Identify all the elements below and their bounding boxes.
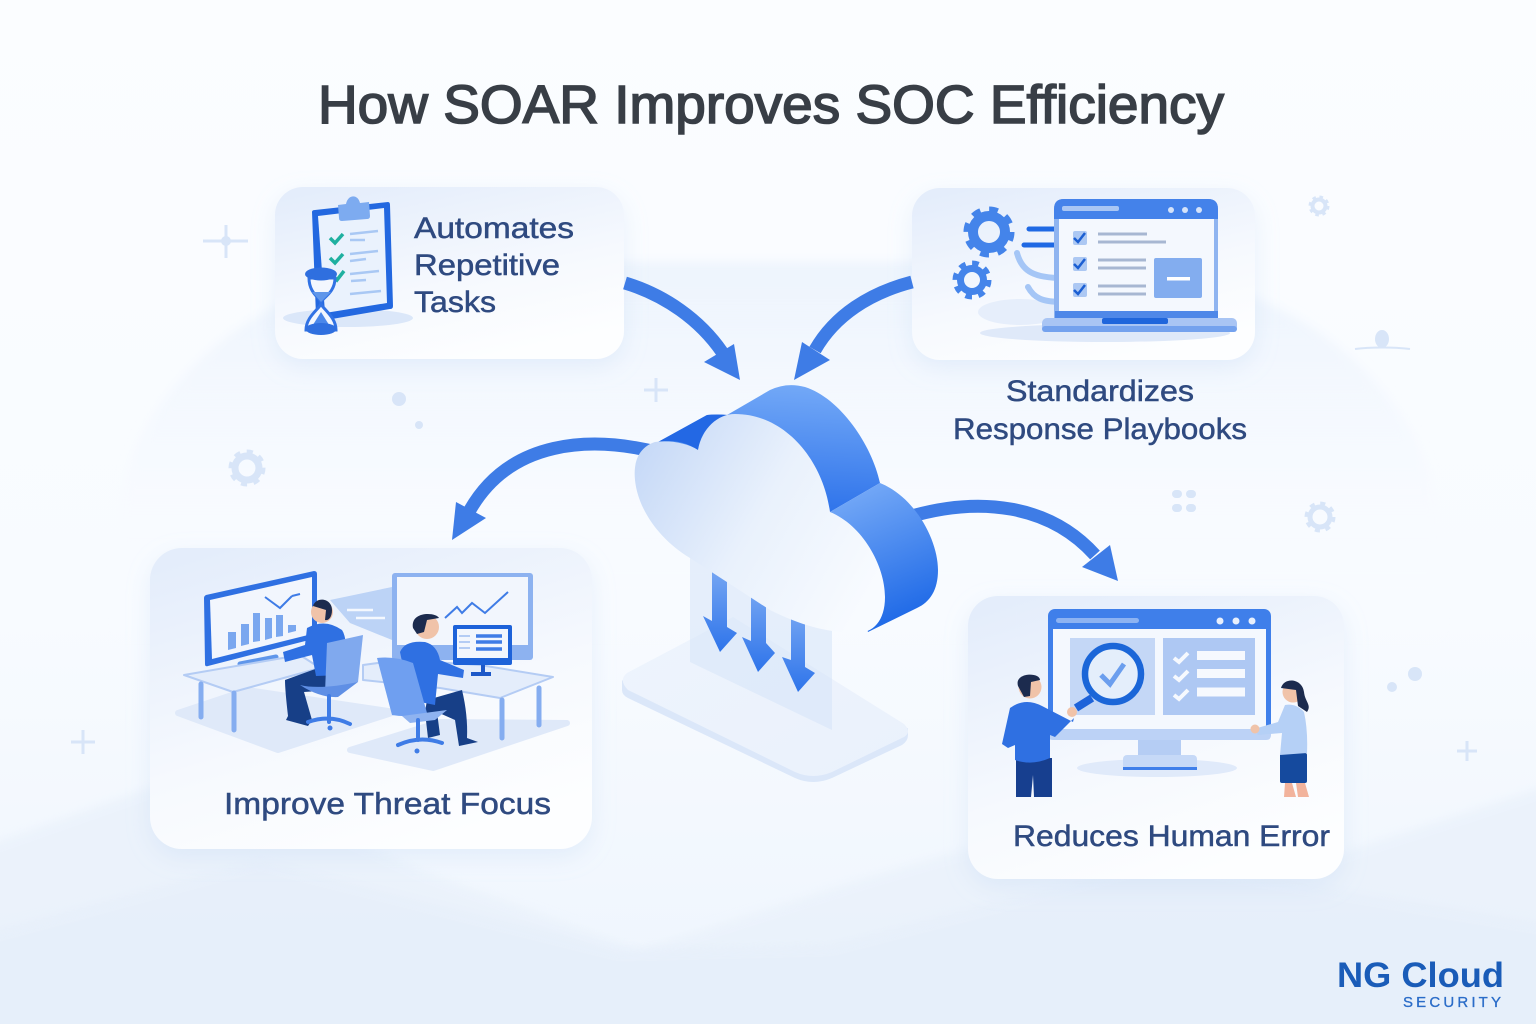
arrow: cloud to human error: [905, 506, 1118, 581]
icon: laptop with checklist: [980, 199, 1237, 342]
label: standardizes: Response Playbooks: [953, 413, 1247, 446]
arrow: cloud to threat focus: [452, 444, 660, 540]
platform: [622, 558, 908, 782]
illustration: analysts at desks: [178, 571, 567, 768]
icon: gears: [955, 209, 1064, 325]
label: automates: Repetitive: [414, 249, 560, 282]
illustration: monitor and magnifier: [1048, 609, 1271, 777]
label: automates: Automates: [414, 212, 574, 245]
logo: [1337, 956, 1504, 1011]
title: How SOAR Improves SOC Efficiency: [318, 75, 1224, 135]
label: reduces human error: Reduces Human Error: [1013, 820, 1330, 853]
label: improve threat focus: Improve Threat Focus: [224, 786, 551, 821]
panel: standardizes response playbooks: [912, 188, 1255, 360]
arrow: automates to cloud: [625, 283, 740, 380]
arrow: playbooks to cloud: [794, 282, 912, 380]
panel: automates repetitive tasks: [275, 187, 624, 359]
icon: cloud: [635, 385, 938, 633]
figure: man: [1002, 675, 1077, 797]
decorative gears and sparkles: [71, 197, 1477, 761]
figure: woman: [1250, 681, 1309, 797]
label: automates: Tasks: [414, 286, 496, 319]
logo: NG Cloud: [1337, 956, 1504, 995]
panel: improve threat focus: [150, 548, 592, 849]
label: standardizes: Standardizes: [1006, 375, 1194, 408]
icon: clipboard and hourglass: [283, 196, 413, 335]
arrows: down into platform: [703, 565, 815, 692]
panel: reduces human error: [968, 596, 1344, 879]
logo: SECURITY: [1403, 994, 1501, 1011]
